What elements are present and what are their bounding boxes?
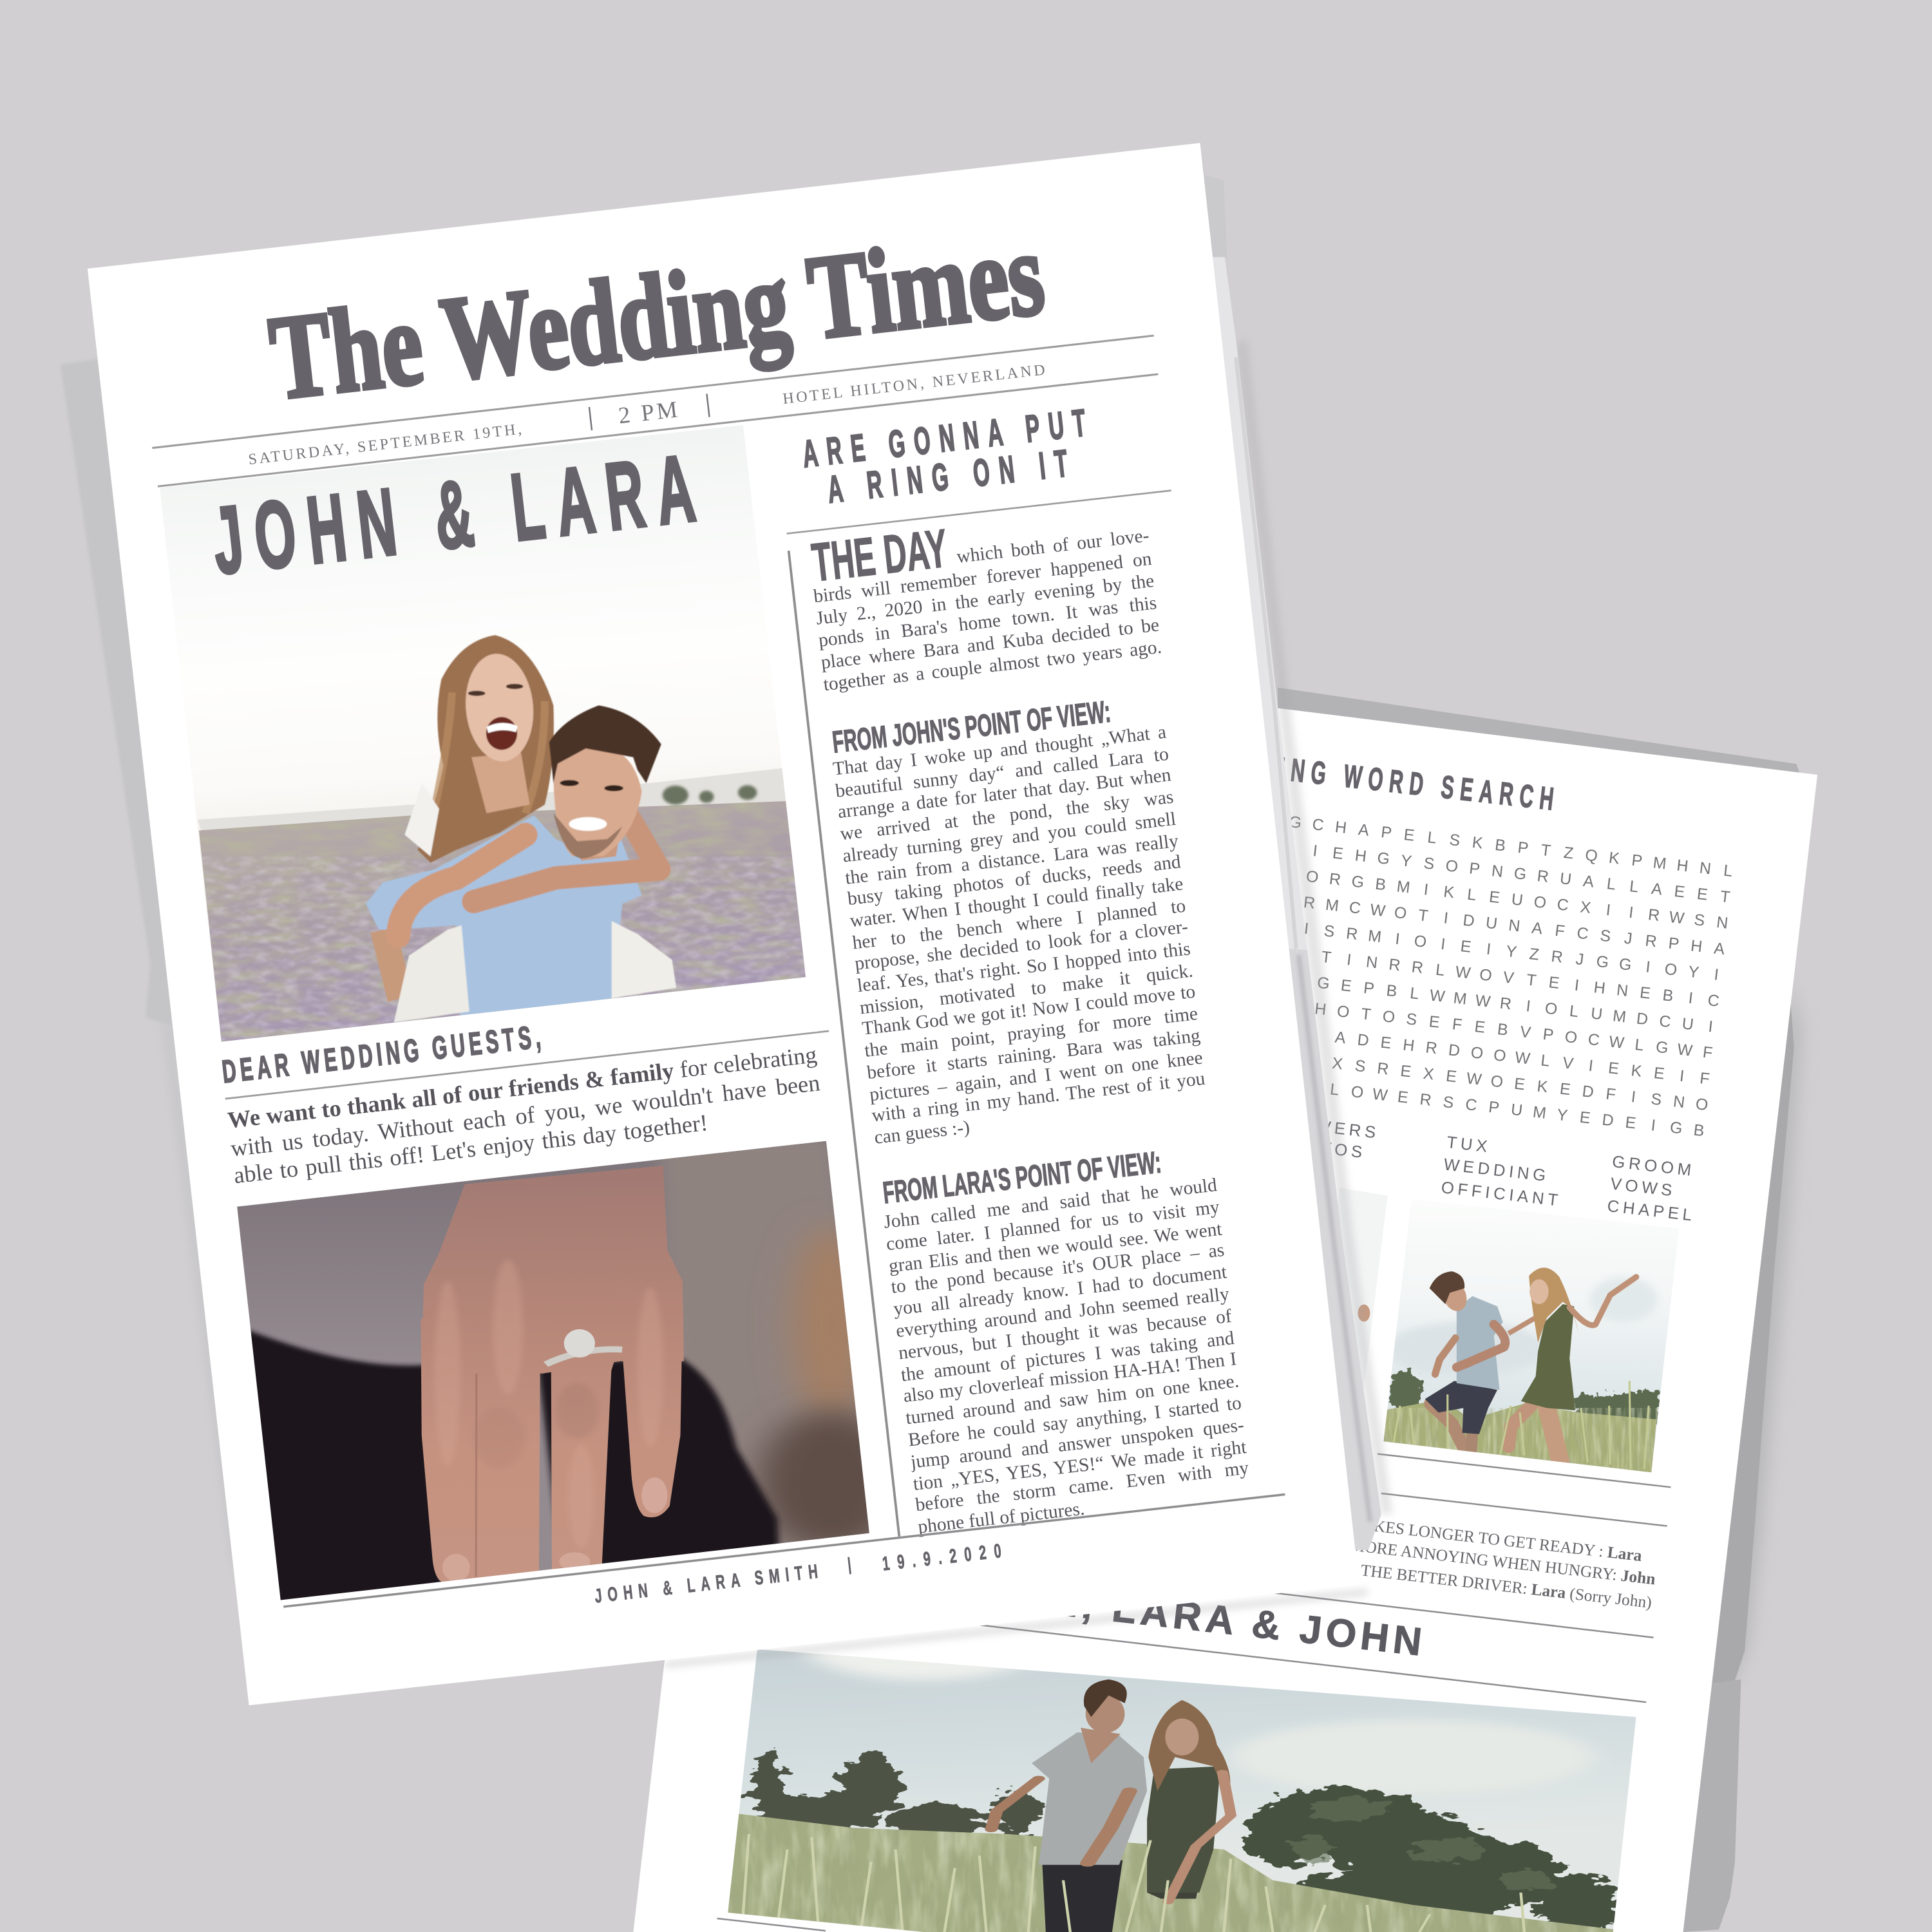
text: lara's story: tion „YES, YES, YES!“ We made it right bbox=[912, 1436, 1247, 1495]
text: lara's story bbox=[883, 1175, 1253, 1538]
text: john's story: pictures – again, and I went on one knee bbox=[868, 1047, 1204, 1105]
text: john's story: That day I woke up and thought „What a bbox=[832, 722, 1168, 780]
text: lara's story: come later. I planned for us to visit my bbox=[885, 1197, 1220, 1255]
word list: TUX bbox=[1446, 1133, 1492, 1156]
text: john's story: mission, motivated to make it quick. bbox=[858, 960, 1194, 1018]
column vertical rule bbox=[789, 551, 899, 1537]
word list: CHAPEL bbox=[1606, 1197, 1696, 1225]
heading: are gonna put a ring on it: ARE GONNA PUT bbox=[800, 402, 1088, 476]
text: john's story: with a ring in my hand. The rest of it you bbox=[871, 1068, 1206, 1127]
word list: PHOTOS bbox=[1273, 1134, 1367, 1162]
text: john's story: water. When I thought I could finally take bbox=[849, 873, 1184, 932]
word search grid: TINRRLWOVTEIHNEBIC bbox=[1320, 948, 1720, 1010]
rule under greeting bbox=[225, 1031, 829, 1099]
text: john's story: already turning grey and you could smell bbox=[842, 808, 1177, 867]
word search grid: IEHGYSOPNGRUALLAEET bbox=[1312, 842, 1731, 906]
text: lara's story: to the pond because it's OUR place – as bbox=[890, 1240, 1226, 1298]
heading: from lara's point of view: FROM LARA'S POINT OF VIEW: bbox=[881, 1145, 1163, 1211]
divider rules bbox=[717, 1454, 1671, 1931]
text: john's story: before it starts raining. Bara was taking bbox=[866, 1025, 1201, 1083]
text: lara's story: you all already know. I had to document bbox=[893, 1262, 1228, 1320]
shadow: front page on back page bbox=[665, 1592, 1368, 1665]
text: lara's story: gran Elis and then we would see. We went bbox=[887, 1218, 1223, 1276]
word list: FLOWERS bbox=[1271, 1112, 1380, 1142]
front page content bbox=[137, 196, 1289, 1642]
text: lara's story: nervous, but I thought it was because of bbox=[897, 1305, 1233, 1364]
text: quiz answers: WHO IS THE BETTER DRIVER: Lara (Sorry John) bbox=[1299, 1554, 1653, 1612]
heading: are gonna put a ring on it bbox=[800, 402, 1092, 514]
text: quiz answers: WHO IS MORE ANNOYING WHEN HUNGRY: John bbox=[1288, 1529, 1656, 1588]
text: john's story: we arrived at the pond, the sky was bbox=[839, 787, 1175, 845]
word search grid: ISRMIOIEIYZRJGGIOYI bbox=[1303, 920, 1719, 984]
word list: GROOM bbox=[1611, 1153, 1696, 1180]
under page: grey edge behind back page bbox=[1278, 688, 1801, 1932]
panel: back page bbox=[633, 647, 1817, 1932]
text: lara's story: before the storm came. Even with my bbox=[914, 1458, 1250, 1517]
text: lara's story: jump around and answer unspoken ques- bbox=[909, 1415, 1245, 1473]
footer: names and date: 19.9.2020 bbox=[882, 1540, 1002, 1575]
text: lara's story: also my cloverleaf mission HA-HA! Then I bbox=[902, 1349, 1238, 1407]
photo: couple in tall grass bbox=[728, 1650, 1636, 1932]
dateline: date: SATURDAY, SEPTEMBER 19TH, bbox=[247, 421, 522, 468]
dateline: time: 2 PM bbox=[617, 396, 679, 428]
word list: OFFICIANT bbox=[1440, 1179, 1562, 1210]
word search grid bbox=[1259, 813, 1735, 1140]
text: the day: birds will remember forever happened on bbox=[813, 549, 1153, 607]
text: the day intro line: which both of our love- bbox=[956, 526, 1150, 568]
text: thank you message: We want to thank all of our friends & family for celebrating bbox=[226, 1043, 818, 1134]
word search grid: ADEHRDOOWLVIEKEIF bbox=[1334, 1028, 1710, 1088]
panel: front page bbox=[88, 143, 1359, 1705]
word search grid: ORGBMIKLEUOCXIIRWSN bbox=[1305, 867, 1729, 933]
text: john's story: busy taking photos of ducks, reeds and bbox=[846, 852, 1182, 910]
text: lara's story: turned around and saw him on one knee. bbox=[905, 1371, 1240, 1429]
text: thank you message bbox=[226, 1043, 825, 1194]
word search grid: RMCWOTIDUNAFCSJRPHA bbox=[1303, 893, 1726, 958]
photo: couple in lavender field bbox=[155, 421, 814, 1050]
text: john's story: the main point, praying for more time bbox=[864, 1003, 1199, 1062]
text: john's story: beautiful sunny day“ and called Lara to bbox=[835, 743, 1170, 802]
word list bbox=[1271, 1112, 1696, 1225]
text: lara's story: everything around and John seemed really bbox=[895, 1284, 1230, 1342]
text: the day: place where Bara and Kuba decided to be bbox=[820, 615, 1160, 674]
heading: the day: THE DAY bbox=[809, 518, 951, 593]
text: the day: July 2., 2020 in the early evening by the bbox=[815, 571, 1155, 629]
heading: with love: WITH LOVE, LARA & JOHN bbox=[824, 1553, 1428, 1664]
shadow: left of front page bbox=[61, 359, 247, 1602]
title: The Wedding Times bbox=[264, 207, 1050, 425]
text: lara's story: John called me and said that he would bbox=[883, 1175, 1218, 1233]
text: quiz answers bbox=[1288, 1510, 1656, 1612]
fold strip: binding edge of front page bbox=[1212, 257, 1381, 1550]
text: quiz answers: WHO TAKES LONGER TO GET READY : Lara bbox=[1310, 1510, 1643, 1565]
text: john's story: arrange a date for later that day. But when bbox=[837, 765, 1172, 823]
text: the day bbox=[813, 549, 1163, 699]
text: john's story: her to the bench where I planned to bbox=[851, 895, 1187, 953]
text: thank you message: able to pull this off! Let's enjoy this day together! bbox=[232, 1111, 709, 1190]
heading: word search: WEDDING WORD SEARCH bbox=[1194, 741, 1562, 818]
text: john's story: can guess :-) bbox=[873, 1117, 971, 1148]
dateline: venue: HOTEL HILTON, NEVERLAND bbox=[782, 362, 1046, 408]
text: john's story: leaf. Yes, that's right. So I hopped into this bbox=[856, 938, 1191, 997]
heading: names: JOHN & LARA bbox=[207, 435, 699, 594]
word list: WEDDING bbox=[1443, 1155, 1550, 1186]
photo: engagement ring on hand bbox=[237, 1141, 869, 1600]
photo: left small, mostly hidden bbox=[1319, 1188, 1388, 1442]
photo: couple walking through grass bbox=[1383, 1249, 1676, 1472]
footer rule bbox=[283, 1495, 1285, 1607]
fold strip shadow bbox=[1200, 143, 1392, 1514]
text: the day: ponds in Bara's home town. It was this bbox=[817, 592, 1158, 652]
heading: from john's point of view: FROM JOHN'S POINT OF VIEW: bbox=[831, 695, 1112, 760]
masthead rules bbox=[152, 336, 1158, 486]
word list: VOWS bbox=[1609, 1175, 1677, 1200]
column rules bbox=[787, 491, 1171, 534]
text: john's story: Thank God we got it! Now I could move to bbox=[861, 982, 1197, 1040]
heading: are gonna put a ring on it: A RING ON IT bbox=[826, 442, 1070, 511]
text: john's story: propose, she decided to look for a clover- bbox=[854, 917, 1189, 975]
word search grid: LOWERSCPUMYEDEIGB bbox=[1329, 1080, 1705, 1140]
word search grid: XSREXEWOEKEDFISNO bbox=[1331, 1054, 1709, 1114]
dateline: time bbox=[589, 393, 710, 431]
text: thank you message: with us today. Without each of you, we wouldn't have been bbox=[229, 1070, 821, 1162]
footer: names and date: JOHN & LARA SMITH bbox=[594, 1561, 819, 1607]
text: lara's story: the amount of pictures I was taking and bbox=[900, 1327, 1235, 1386]
footer: names and date bbox=[594, 1540, 1002, 1607]
text: john's story: the rain from a distance. Lara was really bbox=[844, 830, 1179, 888]
text: lara's story: Before he could say anything, I started to bbox=[907, 1393, 1242, 1451]
heading: dear wedding guests: DEAR WEDDING GUESTS, bbox=[220, 1018, 542, 1090]
word search grid: HOTOSEFEBVPOCWLGWF bbox=[1314, 999, 1714, 1062]
text: lara's story: phone full of pictures. bbox=[917, 1499, 1086, 1538]
text: john's story bbox=[832, 722, 1209, 1153]
word search grid: GEPBLWMWRIOLUMDCUI bbox=[1316, 974, 1714, 1036]
word search grid: GCHAPELSKBPTZQKPMHNL bbox=[1288, 813, 1734, 880]
text: the day: together as a couple almost two years ago. bbox=[822, 637, 1162, 696]
